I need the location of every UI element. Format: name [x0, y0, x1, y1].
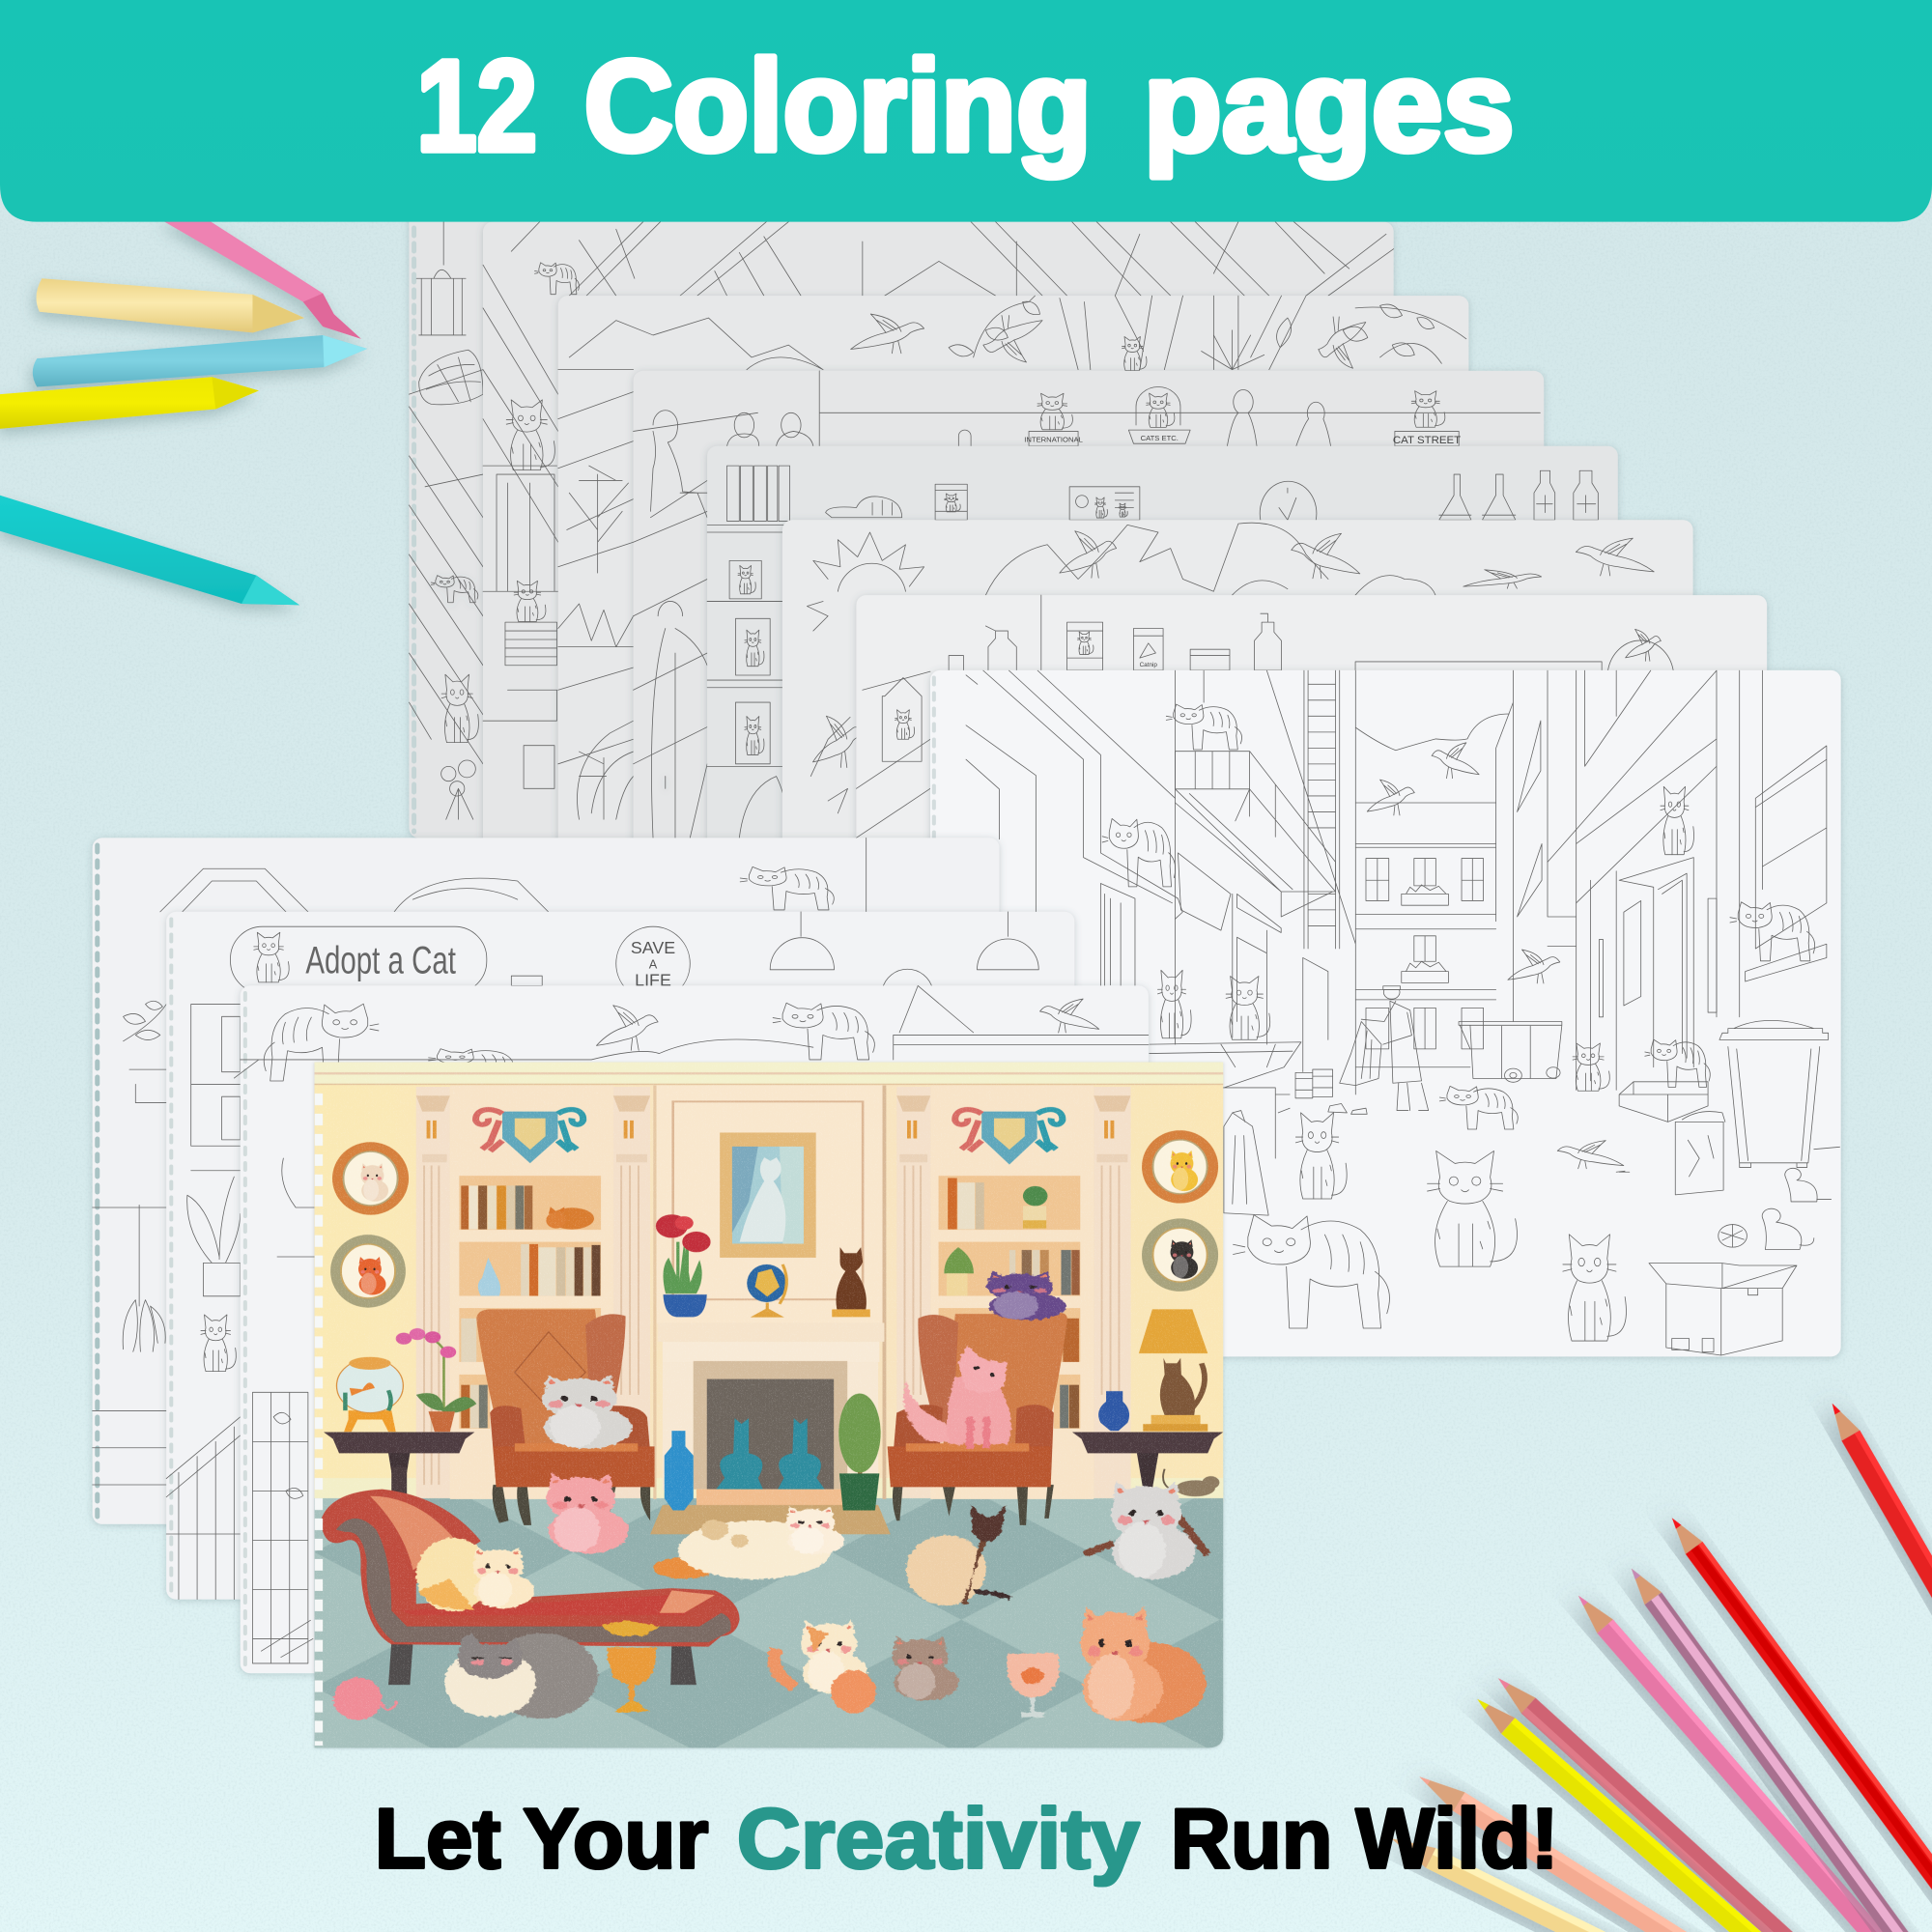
sheet: roof beams: [431, 222, 1394, 913]
cat: cream lying: [653, 1507, 844, 1579]
pencil: cream: [1386, 1829, 1723, 1932]
crayon: teal: [0, 496, 299, 605]
left wingback chair: [476, 1309, 655, 1525]
coloring page stack: back group: [409, 147, 1841, 1356]
crayon: blue: [33, 335, 367, 387]
mouse: [1163, 1469, 1219, 1496]
globe: [747, 1264, 786, 1316]
wall panels and shelves: [416, 1086, 1131, 1499]
cat: pink on right chair: [903, 1346, 1011, 1449]
blue vase: [665, 1431, 694, 1511]
sheet: street signs and people: CATS ETC.: [1141, 434, 1179, 442]
sheet: mountains and trees: [558, 296, 1468, 987]
topiary: [838, 1393, 881, 1511]
cat: long grey fluffy: [444, 1634, 598, 1719]
sign: save a life: A: [649, 957, 658, 972]
sheet: wall strip with lantern and nest: [409, 147, 1320, 838]
cats: [333, 1271, 1208, 1723]
fishbowl: [336, 1357, 403, 1432]
sign: save a life: LIFE: [635, 970, 671, 989]
pink yarn ball: [333, 1678, 398, 1719]
sign: save a life: SAVE: [631, 938, 675, 957]
title: pages: [1144, 35, 1515, 179]
sheet: alley scene, front full page: [930, 670, 1841, 1356]
cat: calico with yarn: [774, 1620, 876, 1713]
goblet: [601, 1621, 660, 1712]
cat: big orange: [1081, 1606, 1206, 1723]
tagline: [375, 1791, 1559, 1887]
speckle texture: [315, 1062, 1223, 1747]
alley cats and birds: [1102, 704, 1815, 1341]
pencil: pink: [1571, 1589, 1932, 1932]
cat: siamese: [906, 1505, 1010, 1605]
sign: adopt a cat: Adopt a Cat: [305, 940, 456, 982]
framed cat painting: [720, 1132, 816, 1258]
colored illustration page: cats in a parlor: [315, 1062, 1223, 1747]
floor: [315, 1498, 1223, 1747]
cat: grey on floor: [1085, 1482, 1208, 1579]
pencil: lilac: [1623, 1562, 1932, 1932]
brown cat statue: [832, 1247, 870, 1317]
sheet: sun, birds and foliage: [782, 520, 1693, 1211]
shelf objects: [478, 1186, 1047, 1295]
right wingback chair: [888, 1313, 1067, 1525]
sheet: adopt a cat shop: [166, 912, 1074, 1600]
orchid: [396, 1328, 476, 1432]
lamp with cat base: [1139, 1309, 1208, 1432]
spiral holes on page edge: [312, 1094, 325, 1746]
round cat portraits: [330, 1130, 1218, 1308]
side tables: [324, 1433, 1223, 1493]
cat: pink on floor: [547, 1473, 629, 1553]
pencil: red edge: [1823, 1398, 1932, 1761]
books: [461, 1178, 1080, 1428]
title: [416, 35, 1515, 179]
spiral holes: [932, 678, 936, 838]
sheet: shelf with books, clock and bottles: [666, 446, 1618, 1137]
pencil: red: [1663, 1512, 1932, 1932]
crayon: yellow: [0, 377, 259, 429]
cat: brown kitten: [892, 1636, 959, 1700]
crayons: [0, 219, 367, 605]
crayon: pink: [160, 219, 361, 339]
header banner: [0, 0, 1932, 222]
alley line art: [966, 670, 1839, 1355]
sheet: street signs and people: CAT STREET: [1393, 435, 1461, 446]
crayon: cream: [37, 278, 304, 332]
red flower in blue pot: [656, 1214, 711, 1317]
sign: adopt a cat: [231, 926, 487, 993]
colored pencils: [1386, 1398, 1932, 1932]
pencil: yellow: [1470, 1691, 1832, 1932]
tagline: Run Wild!: [1171, 1791, 1559, 1887]
chaise lounge: [321, 1490, 740, 1685]
sheet: cats and birds on roof: [234, 985, 1149, 1673]
pencil: peach: [1413, 1768, 1736, 1932]
cat: grey on left chair: [542, 1375, 632, 1449]
sheet: street signs and people: [634, 371, 1544, 1062]
coloring page stack: front group: [93, 838, 1223, 1747]
pencil: salmon: [1492, 1670, 1845, 1932]
sheet: pet products shelf: Catnip: [1140, 662, 1157, 668]
blue vase on table: [1098, 1391, 1129, 1431]
fireplace: [650, 1322, 891, 1534]
sheet: pet products shelf: [856, 595, 1767, 1287]
wall and border: [315, 1062, 1223, 1503]
crests: [476, 1110, 1063, 1165]
title: 12: [416, 35, 537, 179]
tagline: Let Your: [375, 1791, 708, 1887]
title: Coloring: [584, 35, 1092, 179]
cat: purple on chair top: [986, 1271, 1066, 1321]
cat: cream on chaise: [416, 1538, 534, 1611]
cocktail glass: [1008, 1654, 1060, 1718]
sheet: street signs and people: INTERNATIONAL: [1024, 435, 1083, 443]
sign: save a life: [616, 926, 690, 1001]
tagline: Creativity: [737, 1791, 1140, 1887]
sheet: plant and feathers: [93, 838, 999, 1524]
